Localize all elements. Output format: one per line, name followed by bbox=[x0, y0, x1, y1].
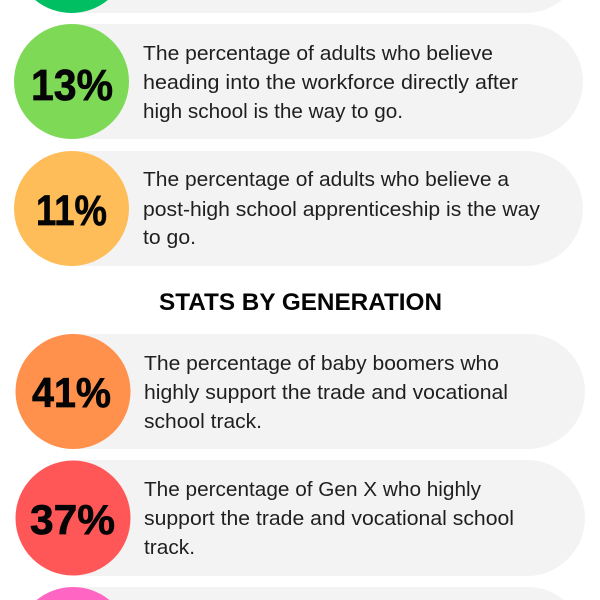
description 41% bbox=[144, 352, 508, 433]
description 41%: highly support the trade and vocational bbox=[144, 381, 508, 404]
description 13% bbox=[143, 42, 518, 123]
circle badge 13% bbox=[14, 24, 129, 139]
number 41%: 41% bbox=[32, 369, 111, 416]
number 11%: 11% bbox=[36, 187, 107, 235]
description 13%: heading into the workforce directly after bbox=[143, 71, 518, 94]
description 41%: The percentage of baby boomers who bbox=[144, 352, 499, 375]
pill background bbox=[74, 334, 585, 449]
circle badge 11% bbox=[14, 151, 129, 266]
stat row: 37% Gen X bbox=[16, 460, 585, 576]
pill background bbox=[72, 151, 583, 266]
description 37%: The percentage of Gen X who highly bbox=[144, 478, 482, 501]
description 13%: The percentage of adults who believe bbox=[143, 42, 493, 65]
circle badge 41% bbox=[16, 334, 130, 449]
number 37%: 37% bbox=[30, 496, 115, 543]
description 41%: school track. bbox=[144, 410, 262, 433]
description 37%: track. bbox=[144, 536, 195, 559]
description 37%: support the trade and vocational school bbox=[144, 507, 514, 530]
pill background bbox=[74, 460, 585, 576]
description 11% bbox=[143, 168, 541, 249]
circle badge 37% bbox=[16, 460, 130, 576]
stat row: 11% apprenticeship bbox=[14, 151, 583, 266]
number 13%: 13% bbox=[31, 61, 113, 110]
stat row: cropped bottom pink bbox=[37, 587, 564, 600]
description 11%: to go. bbox=[143, 226, 196, 249]
description 11%: post-high school apprenticeship is the way bbox=[143, 198, 541, 221]
description 11%: The percentage of adults who believe a bbox=[143, 168, 510, 191]
description 13%: high school is the way to go. bbox=[143, 100, 403, 123]
description 37% bbox=[144, 478, 514, 559]
heading: stats by generation: STATS BY GENERATION bbox=[159, 289, 442, 316]
stat row: cropped top green bbox=[35, 0, 562, 13]
stat row: 41% baby boomers bbox=[16, 334, 585, 449]
pill background bbox=[72, 24, 583, 139]
stat row: 13% workforce bbox=[14, 24, 583, 139]
